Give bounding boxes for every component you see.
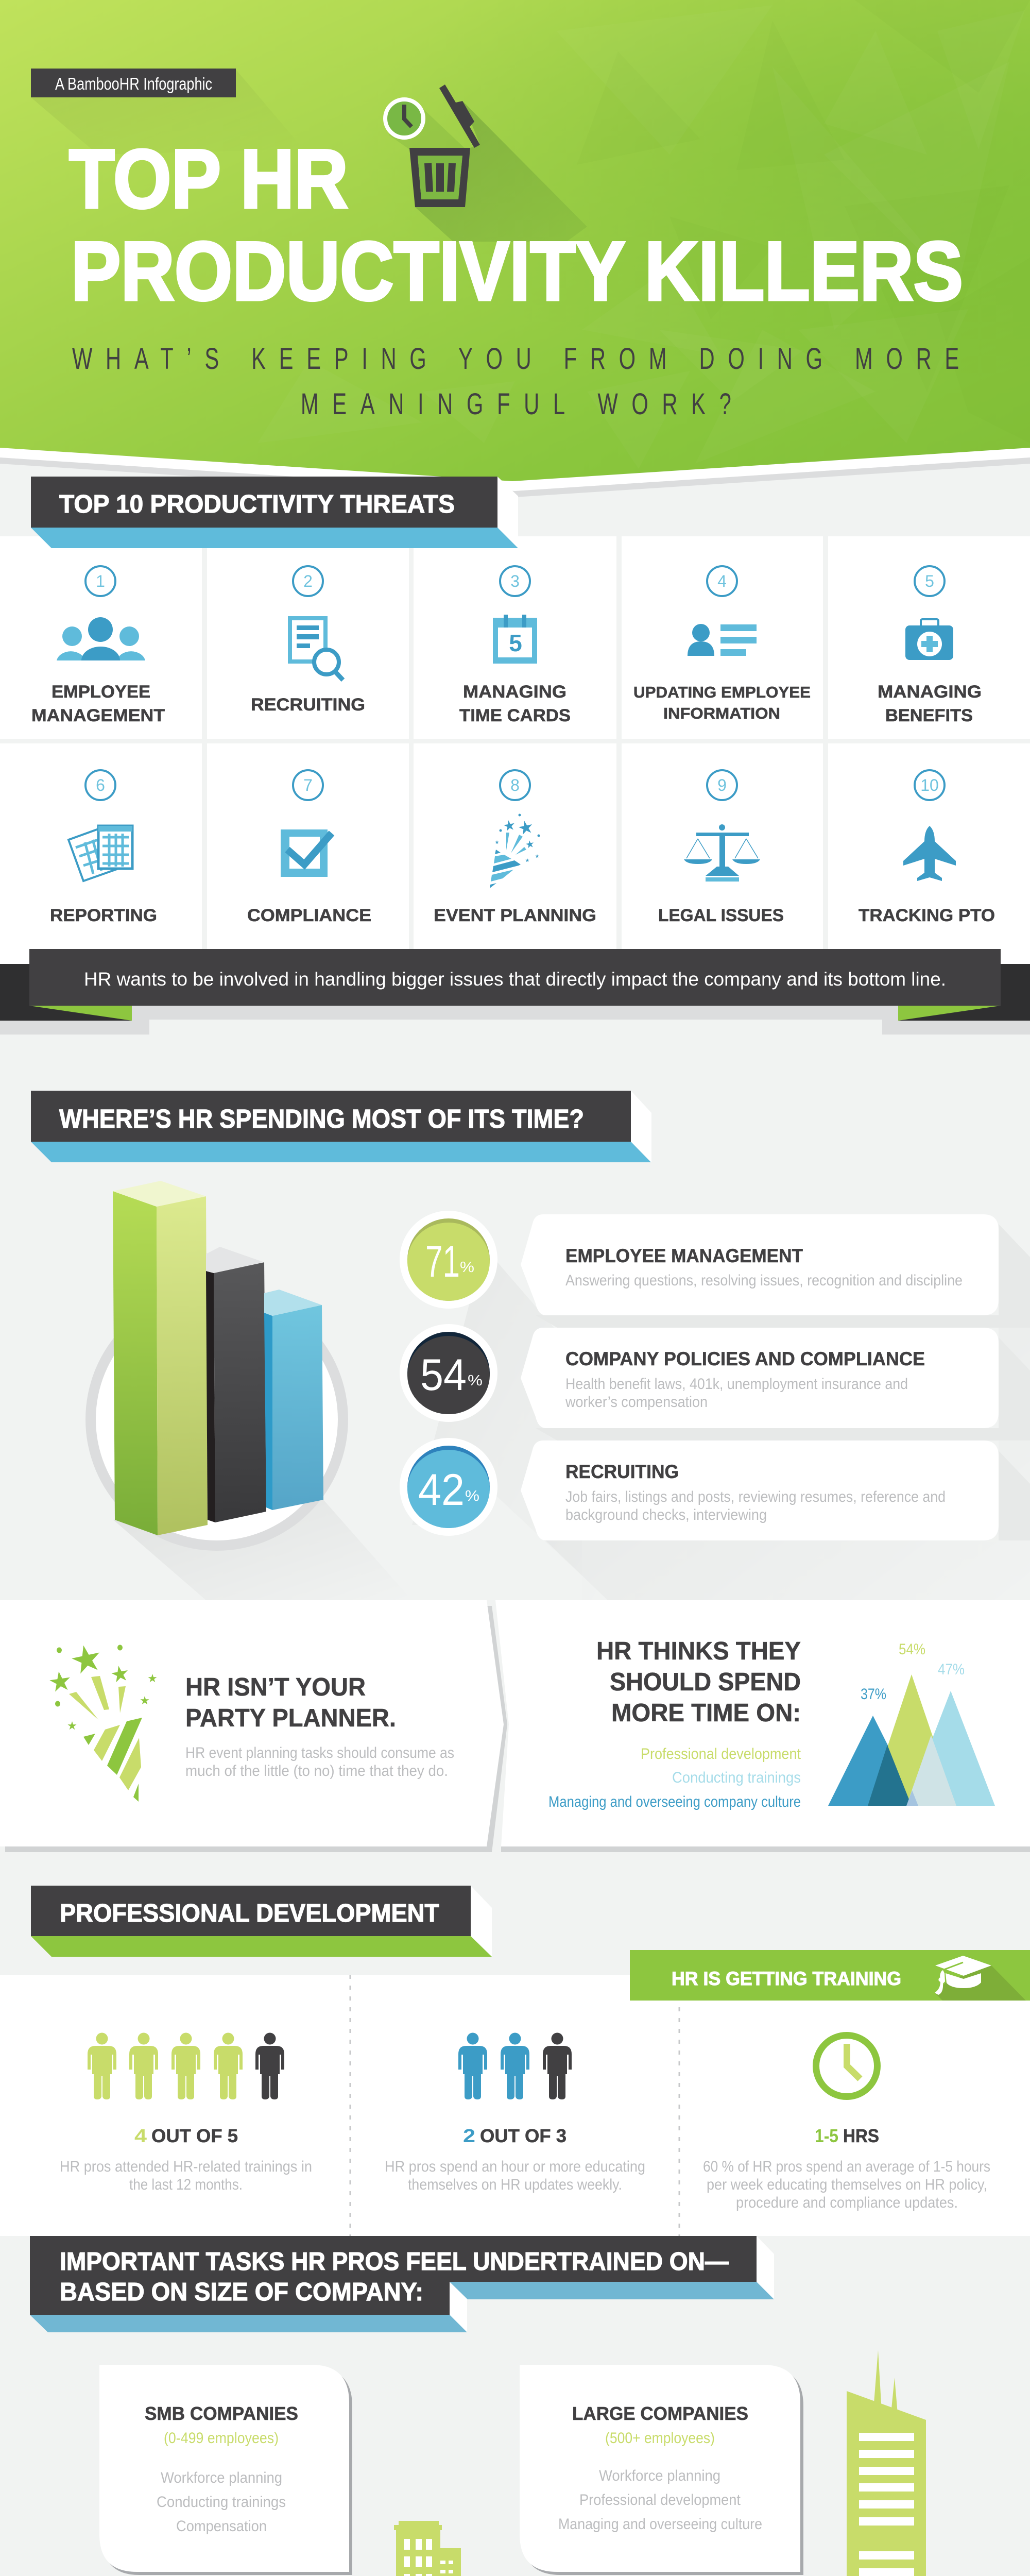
stat: 1-5 hrs: per week educating themselves on HR policy, [707, 2176, 987, 2193]
tag: A BambooHR Infographic [31, 69, 304, 155]
chart: triangle chart: 54% [899, 1641, 925, 1658]
panel: party planner: much of the little (to no) time that they do. [185, 1762, 448, 1780]
header banner [0, 0, 1030, 497]
panel: top 10 productivity threats: 8 [510, 776, 520, 794]
icon: tracking PTO [903, 826, 956, 881]
card: large companies [520, 2365, 803, 2575]
card: employee management [521, 1214, 999, 1315]
stat: 2 out of 3: HR pros spend an hour or more educating [385, 2158, 645, 2175]
threat labels: INFORMATION [663, 704, 780, 722]
heading: professional development: PROFESSIONAL DEVELOPMENT [60, 1900, 439, 1927]
card: SMB companies: SMB COMPANIES [145, 2403, 298, 2424]
threat labels: TIME CARDS [459, 706, 571, 725]
subtitle [72, 342, 959, 421]
icon: graduation cap [935, 1956, 991, 1995]
number badges [85, 566, 945, 800]
chart: triangle chart: 37% [861, 1686, 886, 1703]
bar: company policies dark [206, 1247, 266, 1522]
stat: 54% [400, 1324, 497, 1422]
panel: professional development [0, 1886, 1030, 2236]
title [69, 132, 963, 318]
icon: managing time cards [493, 615, 537, 664]
threat labels: LEGAL ISSUES [658, 906, 784, 925]
card: large companies: Workforce planning [599, 2467, 720, 2484]
stat: 2 out of 3: OUT OF 3 [480, 2125, 566, 2146]
stat: 42%: 42 [418, 1465, 465, 1515]
panel: top 10 productivity threats: 5 [925, 572, 934, 590]
bar: employee management green [113, 1181, 208, 1535]
stat: 2 out of 3: 2 [463, 2125, 475, 2146]
icon: employee management [57, 617, 145, 660]
panel: top 10 productivity threats: 9 [717, 776, 727, 794]
card: recruiting: Job fairs, listings and posts, reviewing resumes, reference and [565, 1488, 946, 1505]
card: recruiting: RECRUITING [565, 1461, 679, 1482]
heading: where's HR spending [31, 1091, 651, 1162]
shadows: time section [113, 1224, 1030, 1600]
card: large companies: LARGE COMPANIES [572, 2403, 748, 2424]
stat: 54%: 54 [420, 1350, 467, 1400]
card: employee management: Answering questions, resolving issues, recognition and discipline [565, 1272, 963, 1289]
card: SMB companies: Workforce planning [161, 2469, 282, 2486]
panel: top 10 productivity threats: 1 [96, 572, 105, 590]
heading: professional development [31, 1886, 492, 1957]
card: company policies: Health benefit laws, 401k, unemployment insurance and [565, 1376, 908, 1393]
icon: clock in trash [385, 84, 587, 242]
icon: party popper [48, 1642, 157, 1802]
stat: 71% [400, 1211, 497, 1309]
panel: top 10 productivity threats: 10 [920, 776, 939, 794]
stat: 42% [400, 1438, 497, 1536]
stat: 4 out of 5: 4 [134, 2125, 147, 2146]
card: SMB companies: (0-499 employees) [164, 2430, 279, 2447]
heading: important tasks [30, 2236, 774, 2332]
stat: 71%: % [460, 1259, 474, 1276]
panel: HR thinks they should spend more time on [495, 1600, 1030, 1852]
stat: 1-5 hrs [703, 2035, 990, 2211]
subtitle: WHAT’S KEEPING YOU FROM DOING MORE [72, 342, 959, 376]
threat labels: COMPLIANCE [247, 906, 371, 925]
icon: tower [842, 2350, 931, 2576]
threat labels: MANAGEMENT [31, 706, 165, 725]
threat labels: EVENT PLANNING [434, 906, 596, 925]
threat labels: EMPLOYEE [52, 682, 150, 702]
stat: 4 out of 5: the last 12 months. [129, 2176, 243, 2193]
subtitle: MEANINGFUL WORK? [301, 387, 731, 421]
card: company policies: worker’s compensation [565, 1394, 708, 1411]
stat: 2 out of 3 [385, 2033, 645, 2193]
threat labels: UPDATING EMPLOYEE [633, 683, 811, 701]
stat: 4 out of 5: OUT OF 5 [151, 2125, 238, 2146]
panel: HR thinks they should spend more time on: HR THINKS THEY [596, 1637, 801, 1665]
bar: recruiting blue [264, 1290, 323, 1510]
icon: managing benefits [905, 619, 953, 660]
legend: Managing and overseeing company culture [548, 1793, 801, 1810]
panel: top 10 productivity threats: 7 [303, 776, 313, 794]
heading: top 10: TOP 10 PRODUCTIVITY THREATS [59, 490, 455, 518]
chart: 3D bar chart [85, 1181, 348, 1551]
heading: important tasks: BASED ON SIZE OF COMPANY: [60, 2278, 423, 2306]
card: SMB companies [99, 2365, 352, 2575]
panel: top 10 productivity threats: 3 [510, 572, 520, 590]
tag: HR is getting training: HR IS GETTING TRAINING [672, 1968, 901, 1989]
stat: 1-5 hrs: 60 % of HR pros spend an average of 1-5 hours [703, 2158, 990, 2175]
threat labels: MANAGING [878, 682, 982, 702]
stat: 1-5 hrs: procedure and compliance updates. [736, 2194, 958, 2211]
panel: party planner [0, 1600, 507, 1852]
icon: updating employee information [688, 624, 757, 656]
threat labels: REPORTING [50, 906, 157, 925]
card: large companies: Professional development [579, 2492, 741, 2509]
chart: triangle chart: 47% [938, 1661, 965, 1678]
threat labels: TRACKING PTO [859, 906, 995, 925]
stat: 4 out of 5 [60, 2033, 312, 2193]
stat: 42%: % [465, 1488, 479, 1504]
legend: Professional development [641, 1745, 801, 1762]
stat: 4 out of 5: HR pros attended HR-related trainings in [60, 2158, 312, 2175]
panel: party planner: HR event planning tasks should consume as [185, 1744, 454, 1761]
panel: top 10 productivity threats: 6 [96, 776, 105, 794]
icon: recruiting [290, 618, 343, 680]
title: TOP HR [69, 132, 348, 226]
heading: top 10 [31, 477, 518, 548]
panel: HR thinks they should spend more time on: SHOULD SPEND [610, 1668, 801, 1696]
heading: where's HR spending: WHERE’S HR SPENDING MOST OF ITS TIME? [59, 1104, 584, 1133]
panel: party planner: PARTY PLANNER. [185, 1704, 396, 1732]
stat: 71%: 71 [425, 1237, 460, 1286]
threat labels [31, 682, 995, 925]
card: company policies [521, 1328, 999, 1428]
icon: reporting [68, 826, 132, 881]
threat labels: RECRUITING [251, 695, 365, 715]
icon: legal issues [684, 824, 760, 882]
callout: bigger issues banner: HR wants to be involved in handling bigger issues that directly impact the company and its bottom line. [84, 969, 946, 990]
card: company policies: COMPANY POLICIES AND COMPLIANCE [565, 1348, 925, 1369]
card: employee management: EMPLOYEE MANAGEMENT [565, 1245, 803, 1266]
heading: important tasks: IMPORTANT TASKS HR PROS FEEL UNDERTRAINED ON— [60, 2248, 729, 2276]
icon: event planning [490, 814, 540, 888]
panel: party planner: HR ISN’T YOUR [185, 1673, 366, 1701]
stat: 1-5 hrs: 1-5 [815, 2125, 838, 2146]
tag: HR is getting training [630, 1950, 1030, 2001]
tag: A BambooHR Infographic: A BambooHR Infographic [55, 74, 212, 93]
panel: top 10 productivity threats [0, 477, 1030, 964]
chart: triangle chart [828, 1641, 995, 1806]
panel: top 10 productivity threats: 2 [303, 572, 313, 590]
card: SMB companies: Conducting trainings [157, 2494, 286, 2511]
icon: small building [393, 2521, 462, 2576]
stat: 2 out of 3: themselves on HR updates weekly. [408, 2176, 622, 2193]
legend: Conducting trainings [672, 1769, 801, 1786]
panel: top 10 productivity threats: 4 [717, 572, 727, 590]
icon: compliance [281, 829, 332, 877]
stat: 54%: % [468, 1372, 483, 1389]
icon: managing time cards: 5 [509, 630, 522, 656]
threat labels: BENEFITS [885, 706, 973, 725]
card: SMB companies: Compensation [176, 2518, 267, 2535]
threat labels: MANAGING [463, 682, 566, 702]
card: recruiting: background checks, interviewing [565, 1506, 767, 1523]
stat: 1-5 hrs: HRS [843, 2125, 879, 2146]
callout: bigger issues banner [0, 949, 1030, 1035]
card: recruiting [521, 1440, 999, 1540]
card: large companies: Managing and overseeing culture [558, 2516, 762, 2533]
legend [548, 1745, 801, 1810]
card: large companies: (500+ employees) [605, 2430, 715, 2447]
panel: HR thinks they should spend more time on: MORE TIME ON: [611, 1699, 801, 1727]
